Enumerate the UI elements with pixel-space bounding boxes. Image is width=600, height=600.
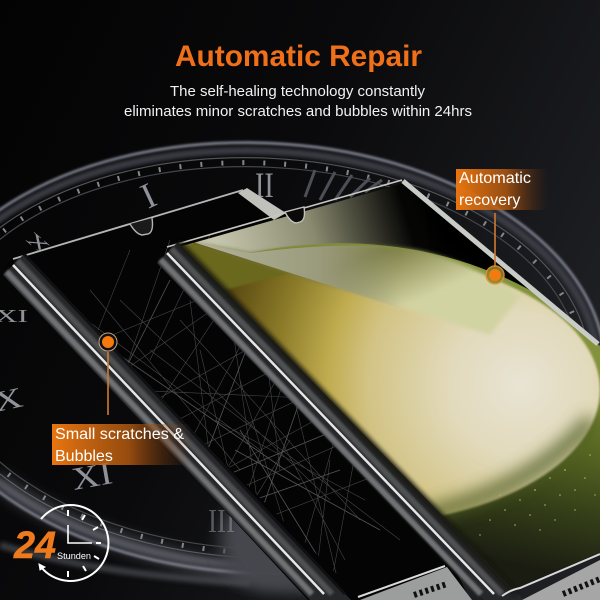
marker dot [99, 333, 117, 351]
stunden label: Stunden [57, 551, 91, 561]
back phone with scratched screen [3, 188, 470, 600]
front phone left metallic edge [157, 242, 524, 600]
clock face with bezel, ticks and numerals [0, 128, 600, 590]
callout: small scratches and bubbles [52, 333, 192, 465]
lower left sphere body [193, 242, 260, 264]
grey left reflection [194, 242, 389, 304]
front phone right edge [403, 181, 598, 344]
callout box [456, 169, 548, 210]
leader line [494, 213, 496, 267]
numeral I: I [134, 175, 162, 216]
back phone bottom edge [358, 566, 472, 600]
callout text line 2: Bubbles [55, 448, 113, 465]
back phone left metallic edge [3, 254, 351, 600]
scratches [90, 236, 400, 574]
leader line [107, 352, 109, 415]
black top-right screen [405, 170, 600, 345]
marker dot [486, 266, 504, 284]
front phone [157, 179, 600, 600]
numeral IX: XI [69, 455, 115, 497]
callout: automatic recovery [456, 169, 548, 284]
title: Automatic Repair [175, 40, 422, 73]
front phone bottom edge [522, 560, 600, 600]
numeral XII: XII [22, 228, 71, 273]
green speckles [479, 454, 596, 536]
callout text: Small scratches & [55, 426, 184, 443]
callout box [52, 424, 192, 465]
diagonal reflection band [193, 242, 520, 335]
green outer sphere [251, 243, 600, 588]
back phone top edge and notch [13, 190, 243, 259]
callout text line 2: recovery [459, 192, 520, 209]
subtitle line 1: The self-healing technology constantly [170, 84, 426, 100]
numeral II: II [255, 165, 274, 205]
number 24: 24 [13, 525, 56, 567]
top reflection glare [182, 186, 411, 253]
numeral III strokes [305, 170, 382, 200]
front phone top edge and notch [167, 213, 285, 247]
numeral VIII: III [208, 502, 235, 540]
callout text: Automatic [459, 170, 531, 187]
subtitle line 2: eliminates minor scratches and bubbles within 24hrs [124, 104, 472, 120]
bright inner sphere [352, 274, 600, 516]
sphere edge fade [425, 420, 592, 515]
left olive corner [182, 242, 287, 290]
screen wallpaper [182, 184, 600, 588]
icon: 24 hour clock [13, 505, 108, 581]
